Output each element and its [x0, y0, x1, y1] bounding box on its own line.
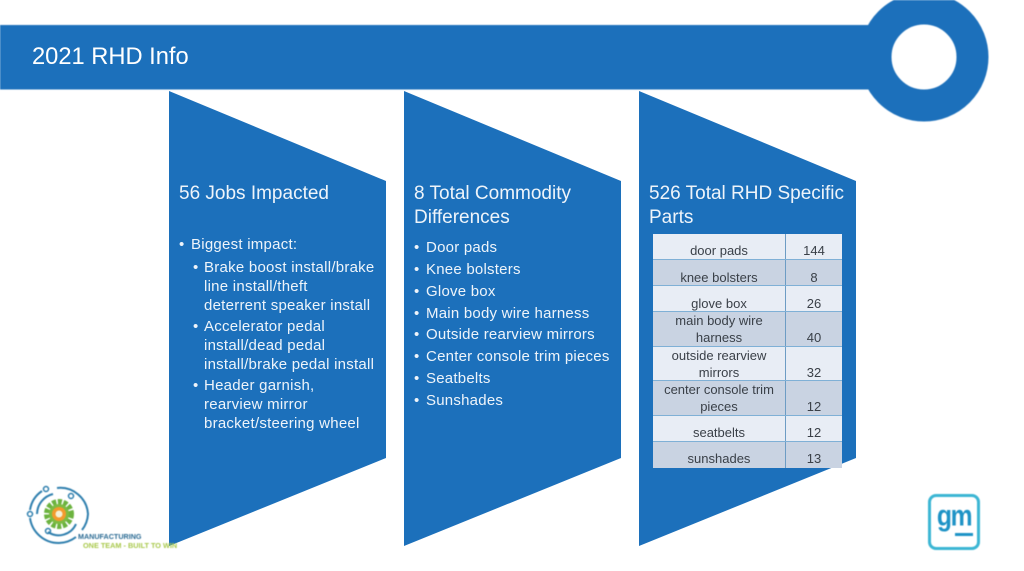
- panel: RHD specific parts: [639, 91, 856, 546]
- panel: jobs impacted: [169, 91, 386, 546]
- heading: commodity differences: [414, 183, 571, 228]
- heading: RHD specific parts: [649, 183, 844, 228]
- bullet list: biggest impact: Accelerator pedal: [204, 318, 325, 335]
- heading: commodity differences: Differences: [414, 207, 510, 228]
- parts table: door pads: [690, 243, 748, 258]
- bullet list: commodities: •: [414, 283, 419, 300]
- bullet list: commodities: Center console trim pieces: [426, 348, 610, 365]
- panel: commodity differences: [404, 91, 621, 546]
- parts table: pieces: [700, 399, 738, 414]
- bullet list: biggest impact: •: [179, 236, 185, 253]
- logo text: manufacturing: MANUFACTURING: [78, 532, 141, 541]
- parts table: seatbelts: [693, 425, 745, 440]
- logo text: gm: gm: [937, 498, 971, 532]
- bullet list: biggest impact: [179, 236, 375, 432]
- bullet list: commodities: •: [414, 392, 419, 409]
- bullet list: biggest impact: Brake boost install/brake: [204, 259, 375, 276]
- bullet list: biggest impact: line install/theft: [204, 278, 308, 295]
- logo text: slogan: ONE TEAM - BUILT TO WIN: [83, 541, 177, 550]
- bullet list: commodities: Glove box: [426, 283, 496, 300]
- parts table: outside rearview: [672, 348, 766, 363]
- title: 2021 RHD Info: [32, 44, 189, 70]
- parts table: main body wire: [675, 313, 763, 328]
- parts table: 40: [807, 330, 821, 345]
- bullet list: biggest impact: rearview mirror: [204, 396, 308, 413]
- bullet list: biggest impact: •: [193, 377, 199, 394]
- bullet list: commodities: Sunshades: [426, 392, 503, 409]
- GM logo: [928, 494, 980, 550]
- bullet list: commodities: •: [414, 239, 419, 256]
- bullet list: commodities: Outside rearview mirrors: [426, 326, 595, 343]
- bullet list: biggest impact: •: [193, 259, 199, 276]
- bullet list: biggest impact: Biggest impact:: [191, 236, 297, 253]
- bullet list: commodities: Main body wire harness: [426, 305, 589, 322]
- parts table: center console trim: [664, 382, 774, 397]
- parts table: sunshades: [688, 451, 750, 466]
- bullet list: commodities: Seatbelts: [426, 370, 491, 387]
- bullet list: biggest impact: •: [193, 318, 199, 335]
- heading: commodity differences: 8 Total Commodity: [414, 183, 571, 204]
- bullet list: biggest impact: Header garnish,: [204, 377, 314, 394]
- bullet list: biggest impact: deterrent speaker install: [204, 297, 370, 314]
- bullet list: commodities: •: [414, 261, 419, 278]
- icon: gear and circuit rings: [26, 485, 90, 545]
- bullet list: biggest impact: install/brake pedal install: [204, 356, 374, 373]
- parts table: knee bolsters: [680, 270, 758, 285]
- heading: RHD specific parts: Parts: [649, 207, 693, 228]
- heading: jobs impacted: 56 Jobs Impacted: [179, 183, 329, 204]
- parts table: harness: [696, 330, 742, 345]
- heading: RHD specific parts: 526 Total RHD Specific: [649, 183, 844, 204]
- manufacturing logo: [26, 485, 178, 550]
- logo underline: [955, 533, 973, 536]
- bullet list: commodities: Door pads: [426, 239, 497, 256]
- parts table: 13: [807, 451, 821, 466]
- parts table: 144: [803, 243, 825, 258]
- bullet list: commodities: •: [414, 370, 419, 387]
- bullet list: commodities: •: [414, 305, 419, 322]
- parts table: 8: [810, 270, 818, 285]
- bullet list: biggest impact: install/dead pedal: [204, 337, 325, 354]
- parts table: glove box: [691, 296, 747, 311]
- bullet list: commodities: [414, 239, 610, 409]
- parts table: 26: [807, 296, 821, 311]
- parts table: 12: [807, 399, 821, 414]
- parts table: 32: [807, 365, 821, 380]
- parts table: mirrors: [699, 365, 739, 380]
- bullet list: biggest impact: bracket/steering wheel: [204, 415, 360, 432]
- bullet list: commodities: Knee bolsters: [426, 261, 521, 278]
- bullet list: commodities: •: [414, 326, 419, 343]
- parts table: [653, 234, 842, 468]
- parts table: 12: [807, 425, 821, 440]
- bullet list: commodities: •: [414, 348, 419, 365]
